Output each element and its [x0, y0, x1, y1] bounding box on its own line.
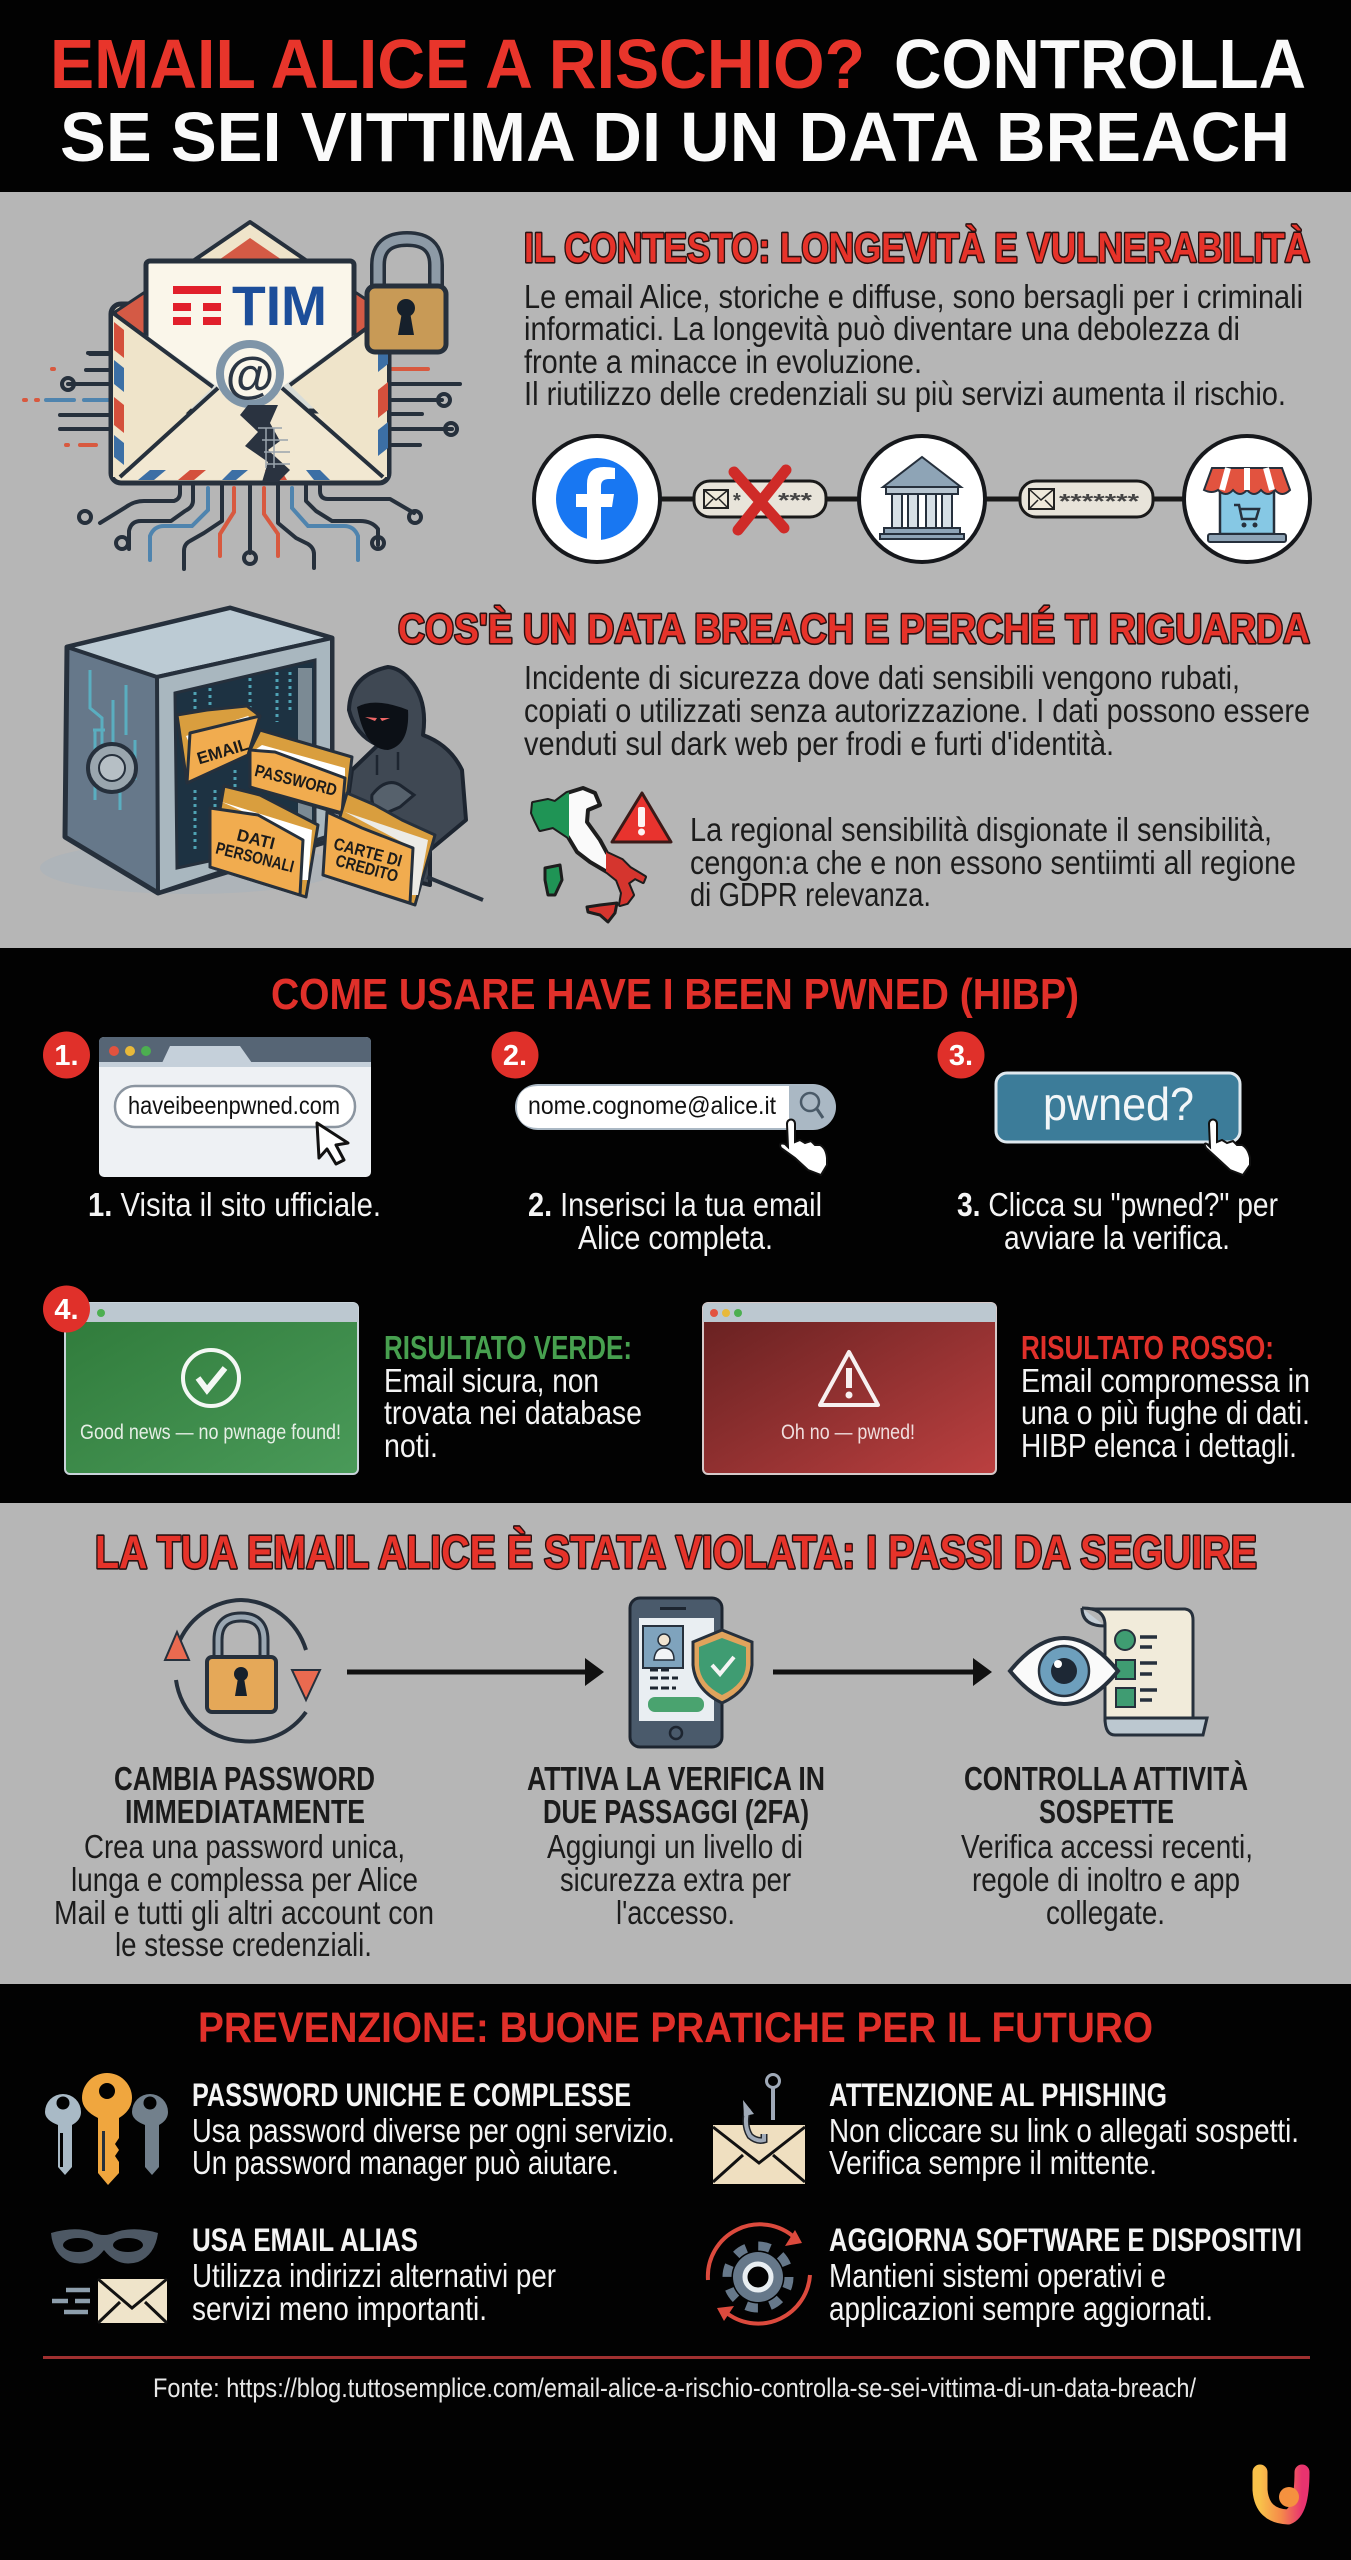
- icon: mask and alias envelope: [51, 2229, 167, 2323]
- text block: regional note: [690, 811, 1296, 913]
- text: attività sospette: CONTROLLA ATTIVITÀ: [964, 1760, 1248, 1797]
- caption: step 2: Alice completa.: [578, 1219, 773, 1256]
- badge: 3: 3.: [949, 1040, 973, 1072]
- icon: credential pill crossed: [694, 470, 826, 530]
- icon: credential pill: [1020, 481, 1153, 517]
- icon: online shop: [1184, 436, 1310, 562]
- text: verifica 2FA: sicurezza extra per: [560, 1861, 791, 1898]
- step 1: browser with address bar: [99, 1037, 371, 1177]
- caption: step 1: 1. Visita il sito ufficiale.: [88, 1186, 381, 1223]
- text: aggiorna software: applicazioni sempre aggiornati.: [829, 2290, 1213, 2327]
- text: password uniche: Usa password diverse per ogni servizio.: [192, 2112, 675, 2149]
- heading: come usare HIBP: COME USARE HAVE I BEEN PWNED (HIBP): [271, 970, 1079, 1019]
- icon: italy map with warning: [525, 780, 671, 922]
- panel: prevention: [0, 1984, 1351, 2560]
- badge: 3: [938, 1032, 984, 1078]
- panel: steps after a breach: [0, 1503, 1351, 1984]
- title: [50, 25, 1306, 176]
- text: verifica 2FA: ATTIVA LA VERIFICA IN: [527, 1760, 825, 1797]
- text: green result: noti.: [384, 1427, 438, 1464]
- caption: step 3: [957, 1186, 1278, 1256]
- text: attività sospette: regole di inoltro e app: [972, 1861, 1240, 1898]
- text: aggiorna software: [829, 2222, 1302, 2327]
- title: EMAIL ALICE A RISCHIO?: [50, 25, 865, 103]
- text: attività sospette: SOSPETTE: [1039, 1793, 1174, 1830]
- badge: 2: [492, 1032, 538, 1078]
- icon: hooded hacker: [330, 667, 466, 885]
- step 3: pwned button: [996, 1073, 1250, 1175]
- step 2: email search bar: [515, 1084, 836, 1175]
- window: red result: Oh no — pwned!: [781, 1421, 915, 1444]
- icon: credential pill crossed: ***: [778, 490, 812, 512]
- text block: context paragraph: [524, 278, 1303, 412]
- text: phishing: [829, 2077, 1299, 2181]
- icon: gear with update arrows: [708, 2224, 810, 2324]
- icon: keys: [45, 2073, 168, 2185]
- text: aggiorna software: Mantieni sistemi operativi e: [829, 2257, 1166, 2294]
- panel: how to use HIBP: [0, 948, 1351, 1503]
- text: verifica 2FA: DUE PASSAGGI (2FA): [543, 1793, 809, 1830]
- icon: padlock with rotation arrows: [165, 1600, 320, 1741]
- text: green result: RISULTATO VERDE:: [384, 1329, 632, 1366]
- text: verifica 2FA: l'accesso.: [616, 1894, 735, 1931]
- text block: data breach paragraph: Incidente di sicurezza dove dati sensibili vengono rubati,: [524, 659, 1240, 696]
- text block: data breach paragraph: [524, 659, 1310, 762]
- caption: step 3: avviare la verifica.: [1004, 1219, 1230, 1256]
- arrow: step 1 to 2: [347, 1658, 604, 1686]
- caption: step 2: 2. Inserisci la tua email: [528, 1186, 822, 1223]
- text: cambia password: CAMBIA PASSWORD: [114, 1760, 375, 1797]
- text: cambia password: Crea una password unica,: [84, 1828, 405, 1865]
- heading: prevenzione: PREVENZIONE: BUONE PRATICHE PER IL FUTURO: [198, 2004, 1153, 2052]
- text: cambia password: [54, 1760, 434, 1963]
- text: red result: Email compromessa in: [1021, 1362, 1310, 1399]
- step 1: browser with address bar: haveibeenpwned.com: [128, 1092, 340, 1120]
- window: green result: Good news — no pwnage found!: [80, 1421, 341, 1444]
- text: verifica 2FA: Aggiungi un livello di: [547, 1828, 803, 1865]
- text: green result: [384, 1329, 642, 1464]
- badge: 1: 1.: [54, 1040, 79, 1072]
- logo: [1260, 2472, 1302, 2517]
- badge: 2: 2.: [503, 1040, 527, 1072]
- text: cambia password: le stesse credenziali.: [115, 1926, 372, 1963]
- text: red result: [1021, 1329, 1310, 1464]
- text block: data breach paragraph: venduti sul dark web per frodi e furti d'identità.: [524, 725, 1114, 762]
- text: verifica 2FA: [527, 1760, 825, 1931]
- text block: context paragraph: fronte a minacce in evoluzione.: [524, 343, 922, 380]
- text: cambia password: lunga e complessa per Alice: [71, 1861, 418, 1898]
- icon: phone with shield: [630, 1598, 752, 1747]
- text: cambia password: IMMEDIATAMENTE: [125, 1793, 365, 1830]
- panel: context and data breach: [0, 192, 1351, 948]
- text: attività sospette: Verifica accessi recenti,: [961, 1828, 1253, 1865]
- text: email alias: servizi meno importanti.: [192, 2290, 487, 2327]
- icon: safe with hacker stealing folders: PERSONALI: [214, 839, 296, 876]
- icon: broken TIM envelope with padlock: @: [226, 347, 274, 403]
- text: red result: HIBP elenca i dettagli.: [1021, 1427, 1297, 1464]
- window: green result: [65, 1303, 358, 1474]
- badge: 4: [43, 1286, 90, 1332]
- icon: safe with hacker stealing folders: PASSWORD: [253, 761, 339, 800]
- text: password uniche: PASSWORD UNICHE E COMPLESSE: [192, 2077, 631, 2113]
- text: cambia password: Mail e tutti gli altri account con: [54, 1894, 434, 1931]
- badge: 4: 4.: [54, 1294, 79, 1326]
- icon: bank: [859, 436, 985, 562]
- window: red result: [703, 1303, 996, 1474]
- text: attività sospette: collegate.: [1046, 1894, 1165, 1931]
- text: password uniche: Un password manager può aiutare.: [192, 2144, 619, 2181]
- source line: Fonte: https://blog.tuttosemplice.com/email-alice-a-rischio-controlla-se-sei-vittima-di-un-data-breach/: [153, 2373, 1196, 2403]
- text block: regional note: di GDPR relevanza.: [690, 876, 931, 913]
- icon: eye with log scroll: [1010, 1608, 1207, 1735]
- icon: safe with hacker stealing folders: [40, 608, 483, 905]
- title: SE SEI VITTIMA DI UN DATA BREACH: [60, 98, 1290, 176]
- step 3: pwned button: pwned?: [1043, 1078, 1194, 1130]
- diagram: credential reuse chain: [534, 436, 1310, 562]
- text: email alias: Utilizza indirizzi alternativi per: [192, 2257, 556, 2294]
- text: red result: RISULTATO ROSSO:: [1021, 1329, 1274, 1366]
- arrow: step 2 to 3: [773, 1658, 992, 1686]
- icon: safe with hacker stealing folders: CREDITO: [334, 851, 400, 886]
- icon: credential pill: *******: [1059, 491, 1139, 513]
- icon: broken TIM envelope with padlock: TIM: [232, 274, 327, 337]
- step 2: email search bar: nome.cognome@alice.it: [528, 1092, 776, 1120]
- title: CONTROLLA: [894, 25, 1306, 103]
- text: email alias: [192, 2222, 556, 2327]
- icon: safe with hacker stealing folders: EMAIL: [195, 735, 251, 768]
- text: phishing: ATTENZIONE AL PHISHING: [829, 2077, 1167, 2113]
- text block: context paragraph: informatici. La longevità può diventare una debolezza di: [524, 310, 1240, 347]
- text: green result: Email sicura, non: [384, 1362, 599, 1399]
- text: green result: trovata nei database: [384, 1394, 642, 1431]
- caption: step 2: [528, 1186, 822, 1256]
- text: phishing: Verifica sempre il mittente.: [829, 2144, 1157, 2181]
- icon: phishing hook on envelope: [713, 2074, 805, 2184]
- text: password uniche: [192, 2077, 675, 2181]
- text: attività sospette: [961, 1760, 1253, 1931]
- badge: 1: [43, 1032, 90, 1078]
- icon: broken TIM envelope with padlock: [24, 222, 460, 569]
- icon: facebook: [534, 436, 660, 562]
- icon: safe with hacker stealing folders: CARTE DI: [332, 834, 404, 871]
- icon: safe with hacker stealing folders: DATI: [235, 826, 277, 853]
- text: red result: una o più fughe di dati.: [1021, 1394, 1310, 1431]
- caption: step 3: 3. Clicca su "pwned?" per: [957, 1186, 1278, 1223]
- icon: credential pill crossed: *: [733, 490, 741, 512]
- panel: page header: [0, 0, 1351, 192]
- text block: regional note: La regional sensibilità disgionate il sensibilità,: [690, 811, 1272, 848]
- text: email alias: USA EMAIL ALIAS: [192, 2222, 418, 2258]
